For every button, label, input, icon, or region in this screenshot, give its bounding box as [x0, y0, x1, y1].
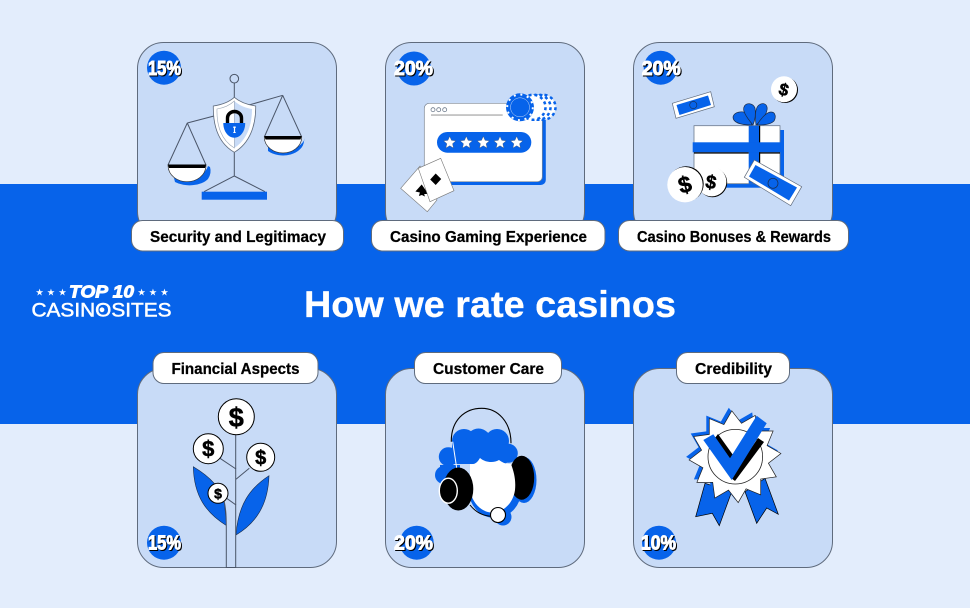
label pill: [132, 220, 344, 251]
badge: 15%: 15%: [148, 532, 181, 554]
panel background: [386, 42, 584, 238]
icon: gift, coins and bills: $: [704, 172, 718, 194]
icon: gift, coins and bills: [667, 76, 802, 206]
logo chip dot: [100, 307, 104, 312]
panel: Security and Legitimacy: [132, 42, 344, 251]
icon: gift, coins and bills: $: [777, 80, 791, 101]
badge: 15%: [147, 51, 181, 85]
panel background: [634, 368, 832, 568]
badge: 15%: 15%: [148, 58, 181, 80]
badge: 15%: [147, 526, 181, 560]
badge: 10%: 10%: [641, 532, 676, 554]
icon: money plant: $: [255, 448, 266, 470]
icon: gift, coins and bills: $: [675, 170, 695, 199]
badge: 20%: [642, 51, 681, 85]
icon: money plant: $: [229, 402, 244, 432]
panel: Credibility: [634, 352, 832, 568]
panel background: [138, 368, 336, 568]
panel: Casino Gaming Experience: [372, 42, 605, 251]
badge: 10%: [641, 526, 676, 560]
panel background: [634, 42, 832, 238]
panel background: [138, 42, 336, 238]
logo stars left: ★★★: [36, 288, 67, 297]
icon: headset agent: [435, 408, 536, 526]
badge: 20%: 20%: [394, 58, 433, 80]
label pill: [153, 352, 318, 384]
icon: award seal with check: [686, 408, 781, 526]
icon: rating window, chips and cards: [401, 93, 556, 212]
label pill: Security and Legitimacy: [150, 229, 326, 246]
icon: money plant: $: [214, 485, 222, 501]
label pill: Casino Gaming Experience: [390, 229, 587, 246]
badge: 20%: [394, 526, 434, 560]
label pill: [618, 220, 848, 251]
label pill: Casino Bonuses & Rewards: [637, 229, 831, 246]
icon: money plant: $: [202, 436, 214, 462]
panel background: [386, 368, 584, 568]
icon: money plant: [193, 399, 275, 568]
panel: Customer Care: [386, 352, 584, 568]
icon: scales with shield: [168, 74, 305, 200]
panel: Casino Bonuses & Rewards: [618, 42, 848, 251]
label pill: [372, 220, 605, 251]
logo stars right: ★★★: [138, 288, 169, 297]
title: How we rate casinos: [304, 284, 676, 325]
blue central band: [0, 184, 970, 424]
label pill: Credibility: [695, 361, 772, 378]
badge: 20%: 20%: [642, 58, 681, 80]
label pill: [676, 352, 790, 384]
label pill: [414, 352, 562, 384]
badge: 20%: 20%: [394, 532, 433, 554]
badge: 20%: [394, 52, 433, 86]
label pill: Financial Aspects: [172, 361, 300, 378]
panel: Financial Aspects: [138, 352, 336, 568]
logo: Top 10 Casino Sites: [32, 282, 172, 322]
label pill: Customer Care: [433, 361, 544, 378]
logo top line: TOP 10: [69, 282, 134, 302]
logo bottom line: CASINOSITES: [32, 300, 172, 322]
